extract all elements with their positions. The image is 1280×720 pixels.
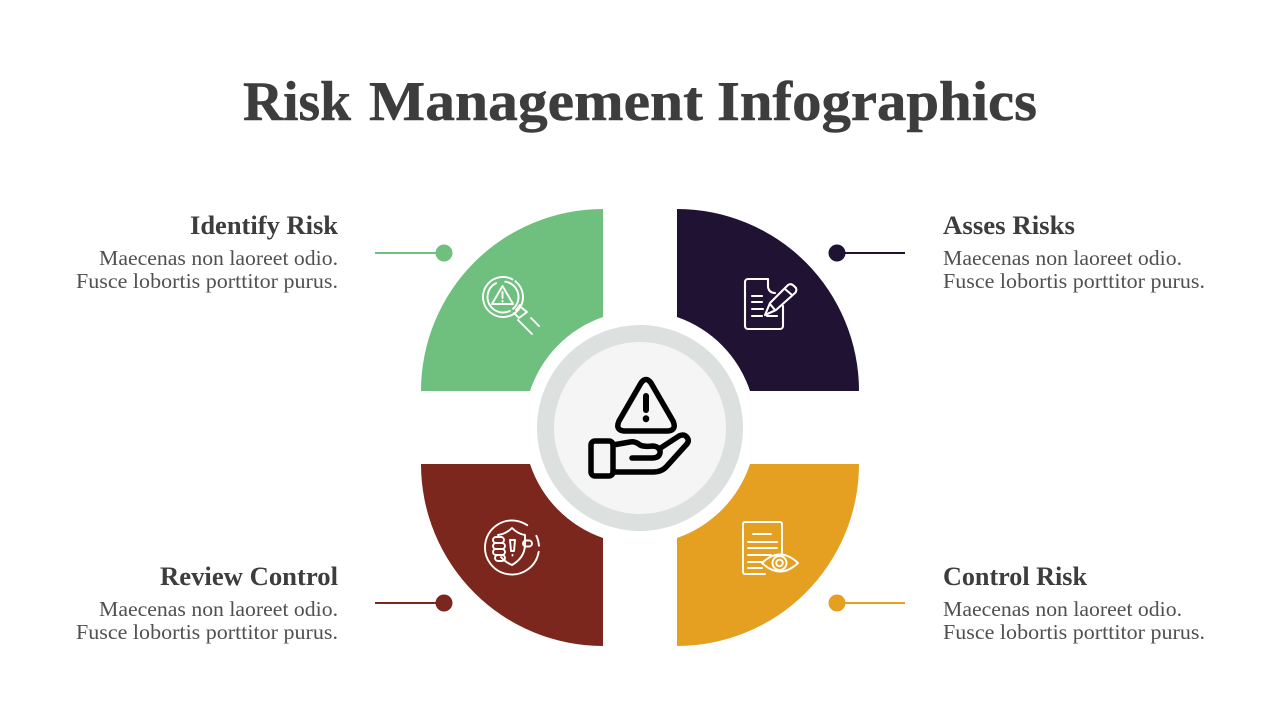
panel: control risk quadrant	[677, 464, 859, 646]
text block: identify risk	[76, 210, 338, 293]
title: Infographics	[717, 71, 1037, 133]
callout: review control connector	[375, 594, 452, 612]
inner light disc	[554, 342, 726, 514]
callout: asses risks connector	[828, 244, 905, 262]
dark purple quarter segment	[677, 209, 859, 391]
text block: control risk: Control Risk	[943, 561, 1087, 591]
text block: asses risks	[943, 210, 1205, 293]
text block: control risk: Maecenas non laoreet odio.	[943, 597, 1182, 621]
icon: magnifier with warning	[475, 269, 539, 334]
callout: identify risk connector	[375, 244, 452, 262]
text block: review control	[76, 561, 338, 644]
icon: document with eye	[743, 522, 798, 574]
title: Management	[369, 71, 703, 133]
text block: control risk	[943, 561, 1205, 644]
panel: identify risk quadrant	[421, 209, 603, 391]
icon: hand holding warning triangle	[591, 380, 688, 476]
text block: review control: Review Control	[160, 561, 338, 591]
text block: asses risks: Maecenas non laoreet odio.	[943, 246, 1182, 270]
panel: asses risks quadrant	[677, 209, 859, 391]
callout: control risk connector	[828, 594, 905, 612]
text block: asses risks: Fusce lobortis porttitor purus.	[943, 269, 1205, 293]
text block: identify risk: Fusce lobortis porttitor purus.	[76, 269, 338, 293]
text block: asses risks: Asses Risks	[943, 210, 1075, 240]
text block: identify risk: Maecenas non laoreet odio.	[99, 246, 338, 270]
title	[243, 71, 1037, 133]
icon: shield with hand	[481, 516, 543, 579]
dark red quarter segment	[421, 464, 603, 646]
text block: control risk: Fusce lobortis porttitor purus.	[943, 620, 1205, 644]
icon: document with pencil	[745, 279, 796, 329]
text block: review control: Fusce lobortis porttitor purus.	[76, 620, 338, 644]
outer grey ring	[537, 325, 743, 531]
title: Risk	[243, 71, 352, 133]
green quarter segment	[421, 209, 603, 391]
orange quarter segment	[677, 464, 859, 646]
panel: review control quadrant	[421, 464, 603, 646]
text block: identify risk: Identify Risk	[190, 210, 338, 240]
text block: review control: Maecenas non laoreet odio.	[99, 597, 338, 621]
central badge	[537, 325, 743, 531]
